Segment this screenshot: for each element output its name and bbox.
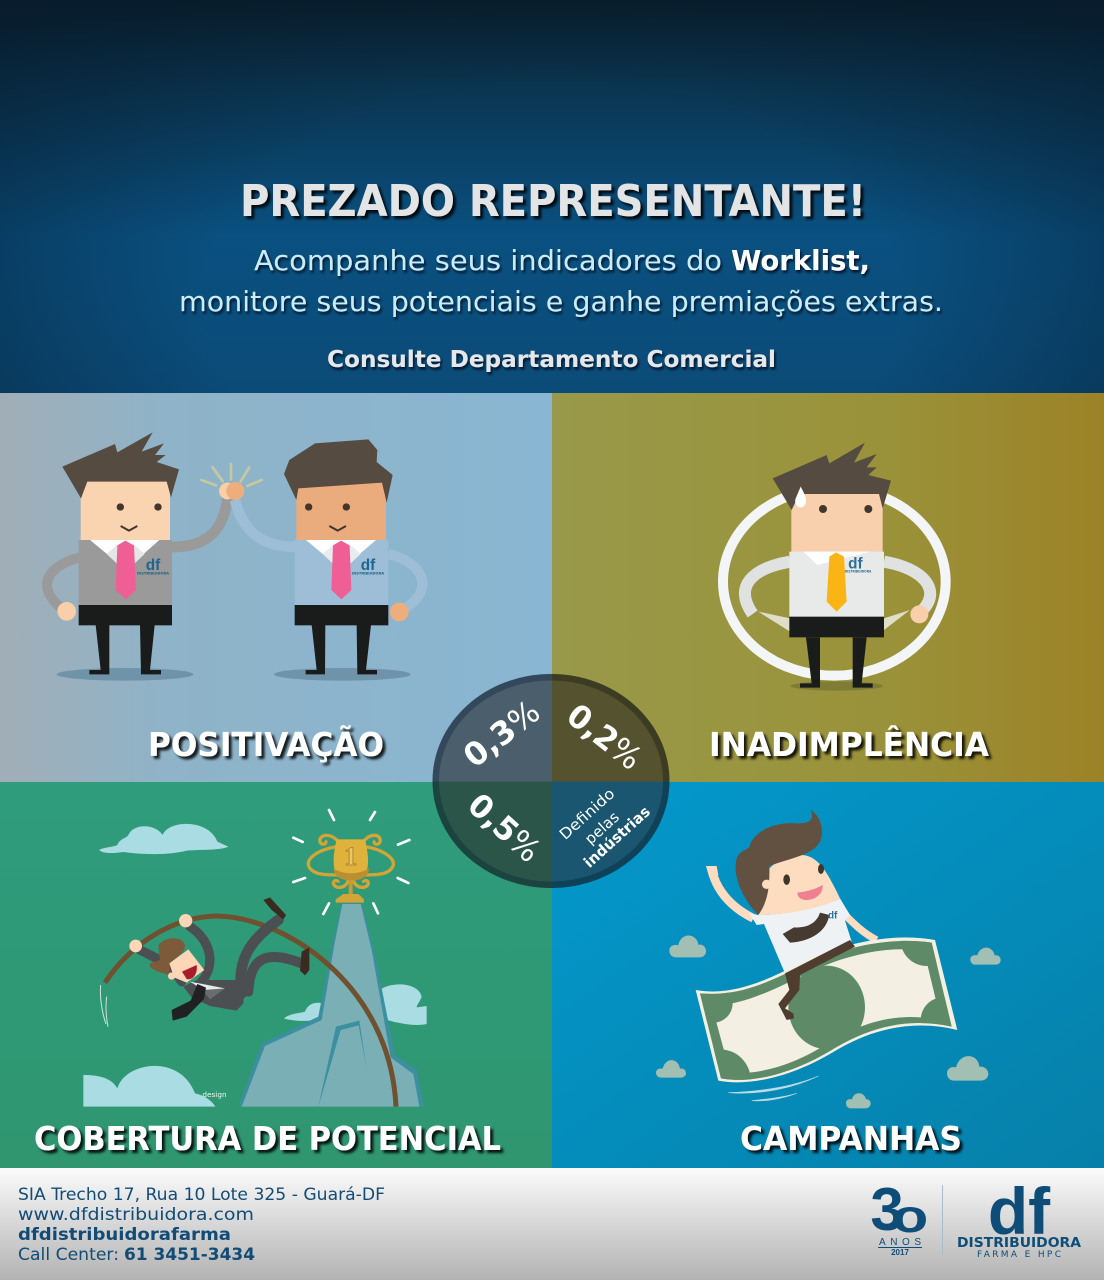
contact info: www.dfdistribuidora.com [18, 1205, 254, 1225]
illustration: two businessmen high five: df [146, 557, 161, 574]
illustration: man riding flying banknote: df [828, 911, 838, 922]
pole [105, 916, 396, 1107]
panel: cobertura de potencial [0, 782, 552, 1168]
contact info: 61 3451-3434 [124, 1245, 255, 1265]
businessman [140, 920, 302, 993]
logo: df distribuidora: FARMA E HPC [977, 1250, 1061, 1260]
logo: df distribuidora: DISTRIBUIDORA [957, 1236, 1081, 1251]
contact info: SIA Trecho 17, Rua 10 Lote 325 - Guará-DF [18, 1185, 385, 1205]
clouds [656, 935, 1001, 1108]
design tag: design [202, 1090, 227, 1099]
value: defined by industries: pelas [581, 808, 623, 848]
head [757, 855, 840, 915]
subtitle text block [179, 244, 943, 318]
subtitle text block: monitore seus potenciais e ganhe premiações extras. [179, 285, 943, 318]
logo: 30 anos: ANOS [879, 1237, 921, 1248]
value: 0,5%: 0,5% [460, 786, 548, 870]
label: inadimplência: INADIMPLÊNCIA [709, 724, 989, 764]
panel: positivação [0, 393, 552, 782]
illustration: man with empty pockets [723, 443, 946, 691]
value: defined by industries: indústrias [580, 803, 654, 871]
man right [296, 482, 386, 541]
logo: 30 anos: 2017 [891, 1248, 909, 1257]
contact info: dfdistribuidorafarma [18, 1225, 231, 1245]
illustration: two businessmen high five: DISTRIBUIDORA [352, 571, 384, 575]
shirt [749, 898, 852, 973]
subtitle text block: Worklist, [731, 244, 870, 277]
chart: central percentage circle [432, 674, 670, 888]
motion lines [728, 1076, 818, 1101]
footer panel [0, 1168, 1104, 1280]
arms [712, 870, 753, 918]
illustration: man riding flying banknote [656, 810, 1001, 1111]
value: 0,2%: 0,2% [560, 696, 649, 778]
panel: inadimplência [552, 393, 1104, 782]
illustration: two businessmen high five: DISTRIBUIDORA [137, 571, 169, 575]
subtitle text block: Acompanhe seus indicadores do [254, 244, 722, 277]
illustration: two businessmen high five: df [361, 557, 376, 574]
logo divider [942, 1185, 943, 1255]
logo: 30 anos [870, 1176, 928, 1257]
illustration: pole vaulter reaching trophy: 1 [344, 841, 357, 871]
label: cobertura de potencial: COBERTURA DE POTENCIAL [34, 1119, 501, 1158]
logo: 30 anos: 3 [870, 1176, 904, 1243]
rays [293, 810, 409, 914]
logo: df distribuidora [957, 1174, 1081, 1260]
man left [81, 480, 170, 541]
illustration: pole vaulter reaching trophy [83, 810, 427, 1107]
contact info: Call Center: [18, 1245, 119, 1265]
value: defined by industries [556, 785, 654, 871]
panel: campanhas [552, 782, 1104, 1168]
title: PREZADO REPRESENTANTE! [240, 176, 866, 227]
label: campanhas: CAMPANHAS [740, 1119, 962, 1158]
logo: 30 anos: o [892, 1191, 928, 1242]
illustration: man with empty pockets: DISTRIBUIDORA [845, 570, 871, 574]
clouds [99, 824, 228, 854]
banknote [696, 938, 957, 1082]
header panel background [0, 0, 1104, 393]
value: 0,3%: 0,3% [456, 692, 547, 775]
logo: df distribuidora: df [988, 1174, 1051, 1248]
pants and leg [778, 940, 855, 1020]
consult note: Consulte Departamento Comercial [327, 347, 776, 373]
illustration: two businessmen high five [47, 432, 422, 681]
value: defined by industries: Definido [556, 785, 618, 843]
mountain [238, 903, 424, 1107]
contact info [18, 1185, 385, 1265]
trophy [308, 835, 393, 887]
label: positivação: POSITIVAÇÃO [148, 724, 384, 764]
tie [783, 913, 829, 943]
illustration: man with empty pockets: df [848, 555, 863, 572]
